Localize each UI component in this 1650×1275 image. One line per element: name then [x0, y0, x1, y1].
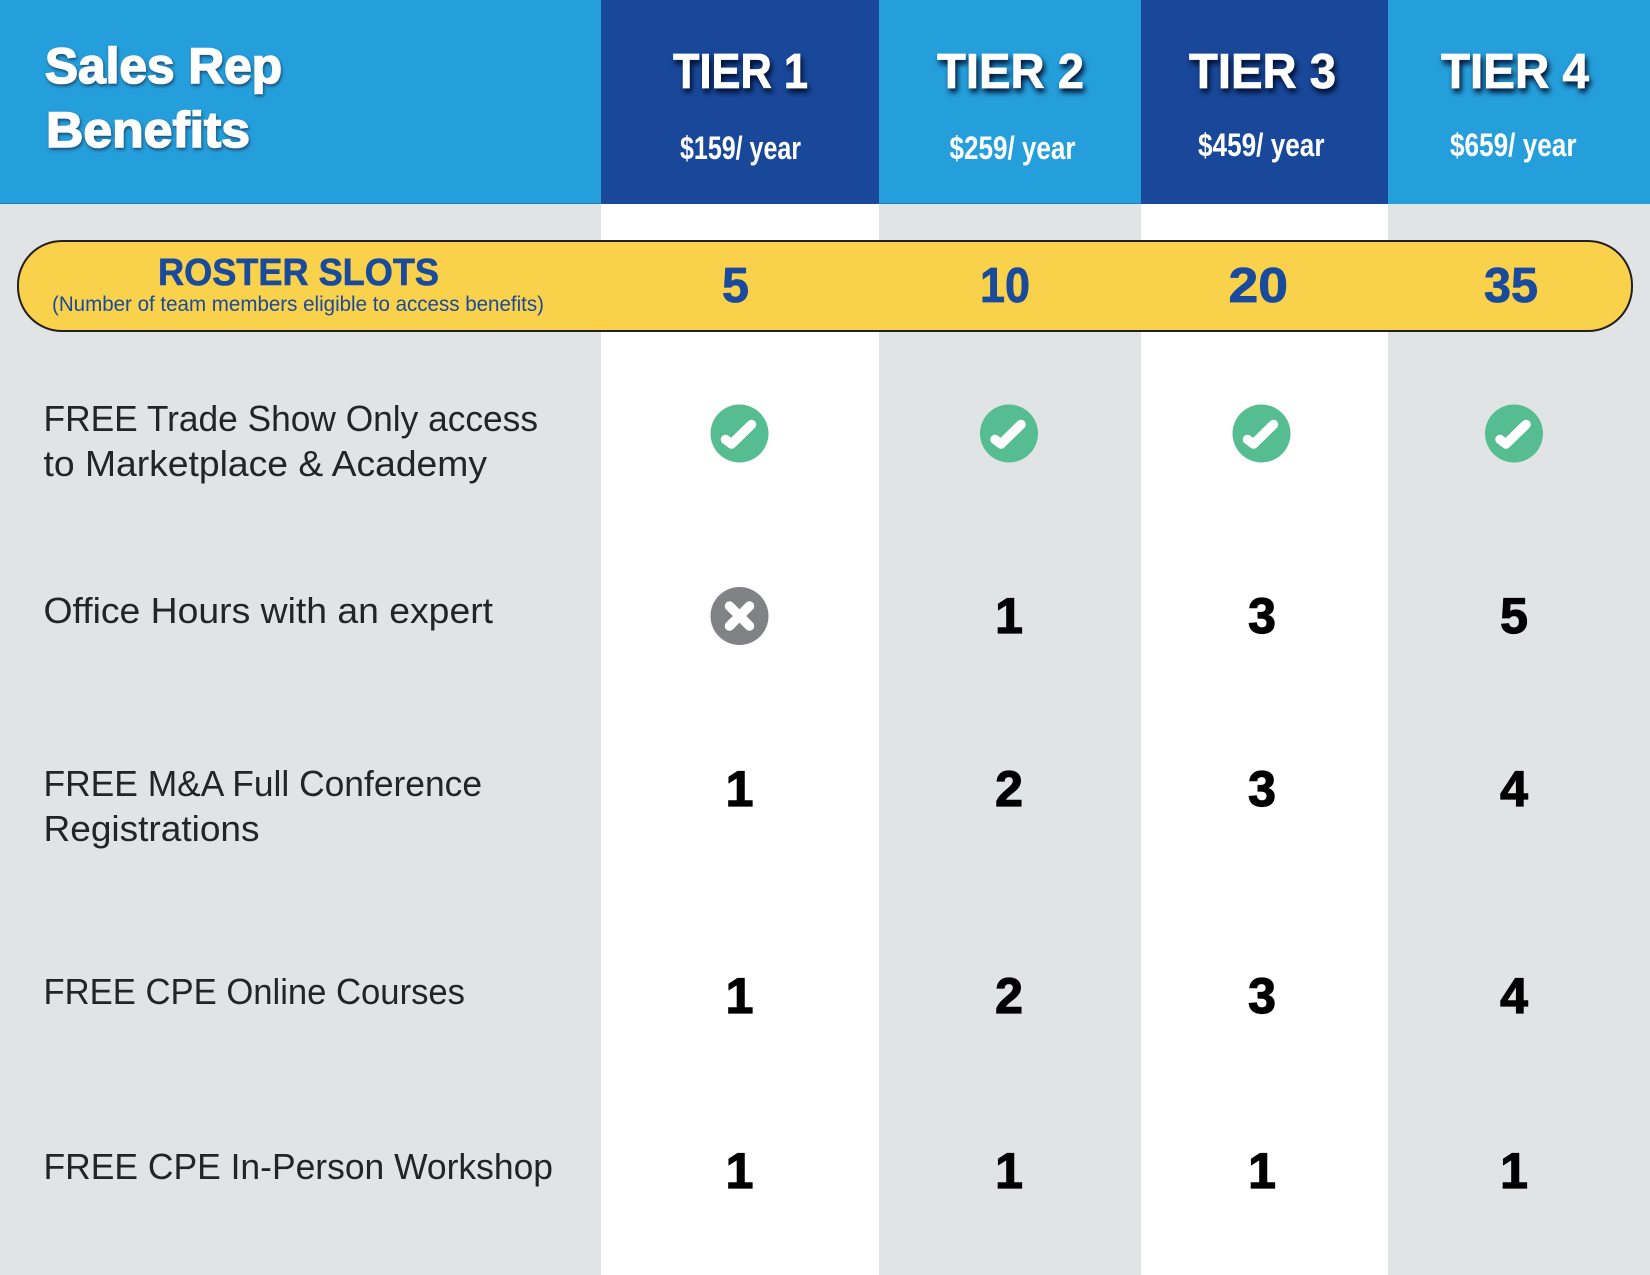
row: CPE in-person workshop [44, 1143, 1528, 1199]
icon: check tier 2 [980, 404, 1038, 462]
row values: 1 [995, 588, 1023, 644]
roster values [722, 259, 1538, 313]
row values [726, 761, 1528, 817]
row: office hours [44, 587, 1528, 645]
row: M&A conference registrations [44, 761, 1528, 849]
row label: FREE CPE Online Courses [44, 971, 465, 1012]
row label: FREE CPE In-Person Workshop [44, 1146, 553, 1187]
header: tier 1 [601, 0, 879, 204]
row label [44, 763, 482, 849]
roster values: 5 [722, 259, 749, 313]
row: trade show access [44, 398, 1543, 484]
icon: check tier 4 [1485, 404, 1543, 462]
row values: 3 [1248, 968, 1276, 1024]
roster slots heading: ROSTER SLOTS [158, 252, 439, 294]
row values: 3 [1248, 588, 1276, 644]
row label: FREE Trade Show Only access [44, 398, 538, 439]
icon: cross tier 1 [710, 587, 768, 645]
row values: 2 [995, 968, 1023, 1024]
roster slots note: (Number of team members eligible to access benefits) [52, 293, 544, 316]
row values: 1 [995, 1143, 1023, 1199]
header: tier 1: $159/ year [680, 130, 801, 166]
header: tier 4 [1441, 45, 1589, 163]
row: CPE online courses [44, 968, 1528, 1024]
row values: 4 [1500, 761, 1528, 817]
header: tier 2 [937, 45, 1084, 166]
title [45, 38, 282, 158]
header: tier 3: TIER 3 [1189, 45, 1336, 99]
header: tier 4: TIER 4 [1441, 45, 1589, 99]
row values: 1 [726, 968, 753, 1024]
row values: 1 [726, 761, 753, 817]
header: tier 2: TIER 2 [937, 45, 1084, 99]
row values: 1 [1500, 1143, 1528, 1199]
row values: 3 [1248, 761, 1276, 817]
roster slots pill [18, 241, 1632, 331]
title: Sales Rep [45, 38, 282, 94]
header: tier 3 [1141, 0, 1388, 204]
header: tier 3: $459/ year [1198, 127, 1324, 163]
row values: 1 [726, 1143, 753, 1199]
header: tier 4: $659/ year [1450, 127, 1576, 163]
header: tier 2: $259/ year [950, 130, 1076, 166]
roster values: 10 [980, 259, 1030, 313]
row values: 1 [1248, 1143, 1276, 1199]
row label: to Marketplace & Academy [44, 443, 487, 484]
row values: 5 [1500, 588, 1528, 644]
row label: Registrations [44, 808, 260, 849]
icon: check tier 3 [1232, 404, 1290, 462]
row values [726, 968, 1528, 1024]
title: Benefits [46, 102, 250, 158]
roster values: 35 [1484, 259, 1538, 313]
header: tier 1: TIER 1 [673, 45, 808, 99]
icon: check tier 1 [710, 404, 768, 462]
row values [995, 588, 1528, 644]
row label [44, 398, 538, 484]
header band [0, 0, 1650, 204]
row values: 4 [1500, 968, 1528, 1024]
row values [726, 1143, 1528, 1199]
row values: 2 [995, 761, 1023, 817]
roster values: 20 [1228, 259, 1288, 313]
row label: FREE M&A Full Conference [44, 763, 482, 804]
row label: Office Hours with an expert [44, 590, 493, 631]
